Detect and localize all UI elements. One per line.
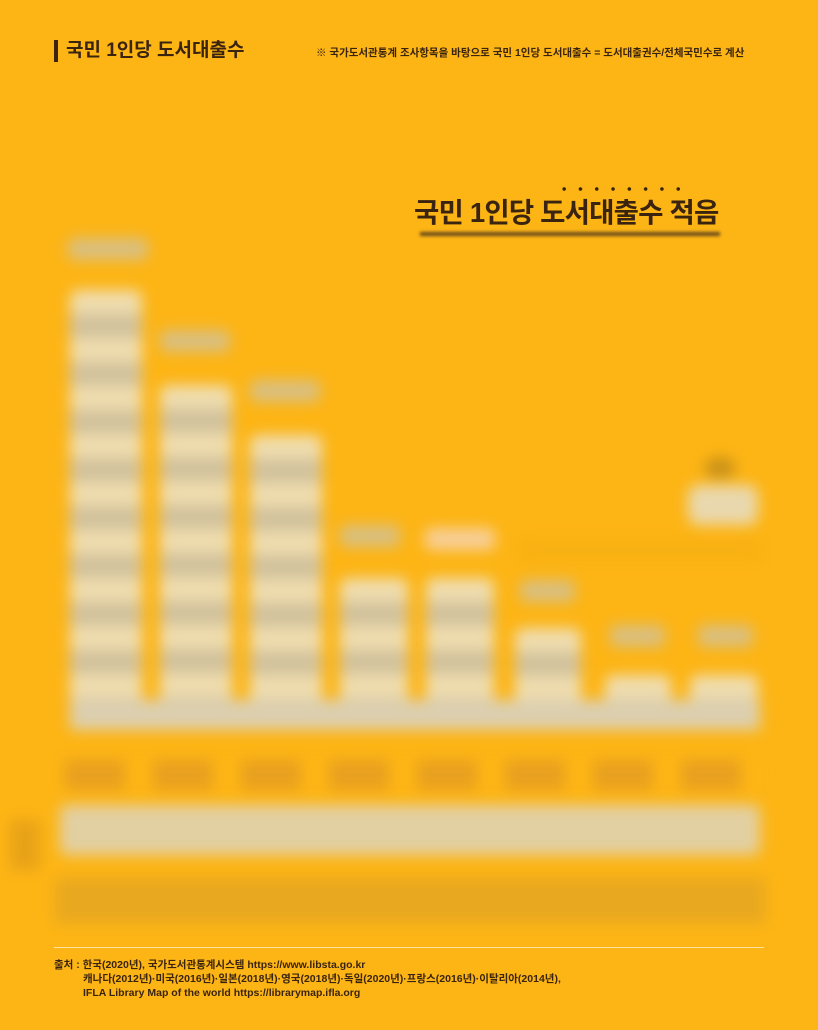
sources: 캐나다(2012년)·미국(2016년)·일본(2018년)·영국(2018년)·독일(2020년)·프랑스(2016년)·이탈리아(2014년), (83, 973, 561, 985)
bottom band (55, 878, 765, 923)
divider (54, 947, 764, 948)
main heading: 국민 1인당 도서대출수 적음 (414, 197, 719, 228)
header title: 국민 1인당 도서대출수 (66, 40, 244, 61)
country name band (60, 805, 760, 855)
flags row (65, 760, 765, 790)
sources: IFLA Library Map of the world https://librarymap.ifla.org (83, 987, 360, 999)
emphasis dots (556, 187, 686, 191)
sources: 출처 : 한국(2020년), 국가도서관통계시스템 https://www.libsta.go.kr (54, 959, 365, 971)
header note: ※ 국가도서관통계 조사항목을 바탕으로 국민 1인당 도서대출수 = 도서대출권수/전체국민수로 계산 (316, 47, 744, 59)
heading underline (420, 232, 720, 236)
chart: book stacks (9, 228, 770, 925)
sources (54, 959, 561, 999)
